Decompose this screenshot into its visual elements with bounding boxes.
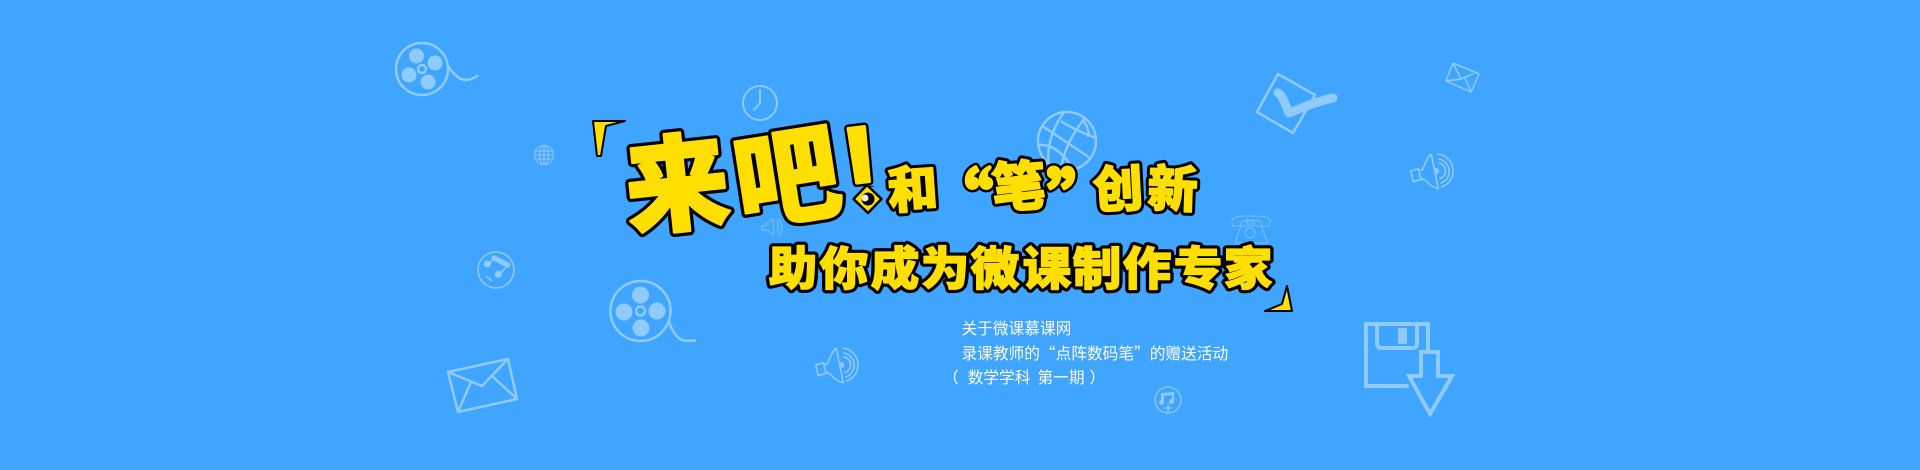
heading: big 来吧: 吧 (721, 85, 850, 254)
heading: 助你成为微课制作专家: 制 (1073, 232, 1121, 299)
heading: 助你成为微课制作专家: 家 (1224, 232, 1272, 299)
heading: 助你成为微课制作专家: 你 (820, 232, 868, 299)
icon: telephone (1232, 216, 1270, 243)
heading: 助你成为微课制作专家: 课 (1023, 232, 1072, 299)
heading: 和“笔”创新: 笔 (989, 141, 1048, 224)
heading: 和“笔”创新: 新 (1146, 149, 1199, 223)
icon: small envelope (1446, 63, 1479, 92)
heading: 助你成为微课制作专家: 作 (1123, 232, 1171, 299)
banner artwork (394, 42, 1480, 418)
heading: 助你成为微课制作专家: 家 (1224, 232, 1272, 299)
heading: 和“笔”创新: “ (927, 148, 993, 244)
heading: 助你成为微课制作专家: 助 (769, 232, 817, 299)
heading: 助你成为微课制作专家: 助 (769, 232, 817, 299)
heading: 和“笔”创新: 和 (885, 148, 940, 224)
icon: large envelope (448, 359, 517, 412)
heading: 助你成为微课制作专家: 成 (871, 232, 919, 299)
icon: checkbox with tick (1257, 74, 1333, 133)
icon: small speaker behind title (762, 219, 782, 235)
icon: top-left corner bracket (593, 121, 625, 156)
heading: big 来吧: 来 (617, 96, 736, 257)
heading: exclamation mark with eye (844, 122, 883, 214)
heading: 和“笔”创新: 创 (1091, 149, 1145, 223)
heading: 助你成为微课制作专家: 你 (820, 232, 868, 299)
text block: event description (943, 316, 1228, 388)
heading: 和“笔”创新: ” (1047, 148, 1113, 244)
heading: 助你成为微课制作专家: 课 (1023, 232, 1072, 299)
heading: big 来吧 (617, 85, 850, 257)
text block: event description: 录课教师的“点阵数码笔”的赠送活动 (962, 341, 1228, 364)
heading: 助你成为微课制作专家 (769, 232, 1272, 299)
heading: exclamation mark with eye: ! (834, 101, 888, 233)
icon: large globe (1038, 112, 1096, 170)
heading: exclamation mark with eye: ! (834, 101, 888, 233)
heading: 和“笔”创新 (885, 141, 1199, 244)
heading: 和“笔”创新: “ (927, 148, 993, 244)
icon: bottom-right corner bracket (1265, 286, 1292, 311)
heading: 和“笔”创新: 和 (885, 148, 940, 224)
heading: 助你成为微课制作专家: 微 (971, 232, 1020, 299)
icon: film reel top left (396, 43, 477, 95)
heading: 助你成为微课制作专家: 专 (1174, 232, 1222, 299)
icon: music plus (1155, 387, 1181, 413)
icon: clock (743, 86, 777, 120)
heading: big 来吧: 吧 (721, 85, 850, 254)
heading: 助你成为微课制作专家: 为 (921, 232, 969, 299)
icon: small globe (534, 146, 554, 164)
heading: 助你成为微课制作专家: 作 (1123, 232, 1171, 299)
icon: speaker right (1411, 154, 1453, 189)
heading: 助你成为微课制作专家: 微 (971, 232, 1020, 299)
heading: 和“笔”创新: 笔 (989, 141, 1048, 224)
icon: music circle left (478, 252, 514, 288)
text block: event description: （ 数学学科 第一期 ） (943, 365, 1105, 388)
heading: 助你成为微课制作专家: 制 (1073, 232, 1121, 299)
icon: floppy disk with download arrow (1366, 324, 1452, 414)
heading: 助你成为微课制作专家: 成 (871, 232, 919, 299)
heading: 和“笔”创新: ” (1047, 148, 1113, 244)
heading: 和“笔”创新: 新 (1146, 149, 1199, 223)
text block: event description: 关于微课慕课网 (962, 316, 1071, 339)
icon: film reel centre (610, 281, 695, 341)
icon: speaker centre (816, 348, 858, 383)
heading: 助你成为微课制作专家: 为 (921, 232, 969, 299)
heading: 和“笔”创新: 创 (1091, 149, 1145, 223)
heading: 助你成为微课制作专家: 专 (1174, 232, 1222, 299)
heading: big 来吧: 来 (617, 96, 736, 257)
